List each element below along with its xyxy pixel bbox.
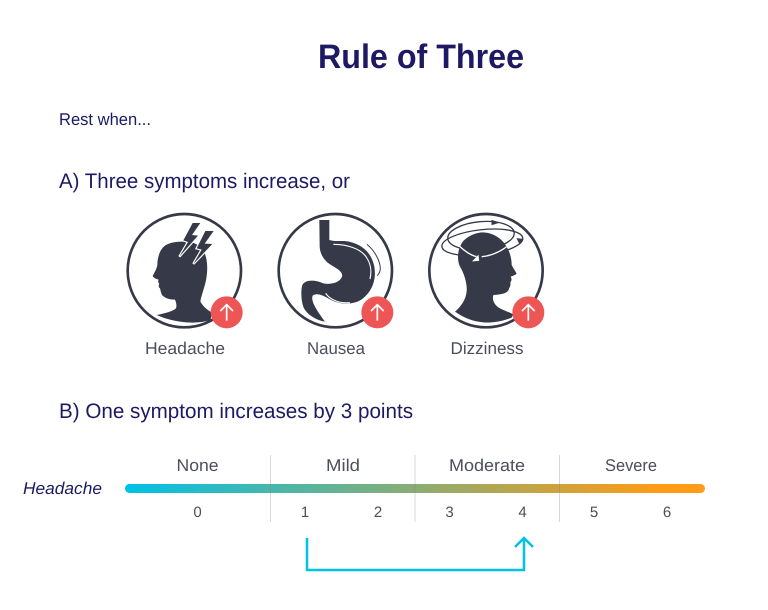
icon: headache bbox=[128, 214, 243, 328]
label: dizziness: Dizziness bbox=[450, 339, 524, 358]
severity labels: None bbox=[176, 456, 218, 475]
severity labels: Mild bbox=[326, 456, 360, 475]
severity scale bbox=[23, 455, 705, 570]
severity labels bbox=[176, 456, 657, 475]
badge: increase bbox=[211, 296, 243, 328]
score numbers: 4 bbox=[518, 504, 527, 521]
intro text: Rest when... bbox=[59, 110, 151, 129]
arrow: 1 to 4 bbox=[307, 538, 533, 570]
badge: increase bbox=[512, 296, 544, 328]
score numbers bbox=[193, 504, 671, 521]
score numbers: 6 bbox=[663, 504, 671, 521]
score numbers: 1 bbox=[301, 504, 309, 521]
heading: one symptom: B) One symptom increases by 3 points bbox=[59, 400, 413, 423]
severity labels: Moderate bbox=[449, 456, 525, 475]
badge: increase bbox=[361, 296, 393, 328]
score numbers: 5 bbox=[590, 504, 598, 521]
icon: nausea bbox=[279, 214, 393, 328]
label: nausea: Nausea bbox=[307, 339, 366, 358]
severity labels: Severe bbox=[605, 456, 657, 475]
gradient bar bbox=[125, 484, 705, 493]
score numbers: 2 bbox=[374, 504, 382, 521]
score numbers: 3 bbox=[445, 504, 454, 521]
score numbers: 0 bbox=[193, 504, 202, 521]
label: headache: Headache bbox=[145, 339, 225, 358]
heading: three symptoms: A) Three symptoms increase, or bbox=[59, 170, 350, 193]
title: Rule of Three bbox=[318, 38, 524, 76]
row label: headache: Headache bbox=[23, 479, 102, 498]
rotation arrowheads bbox=[472, 220, 523, 262]
panel: symptom icons bbox=[128, 214, 544, 358]
icon: dizziness bbox=[429, 214, 544, 328]
lightning bolts bbox=[179, 223, 214, 264]
